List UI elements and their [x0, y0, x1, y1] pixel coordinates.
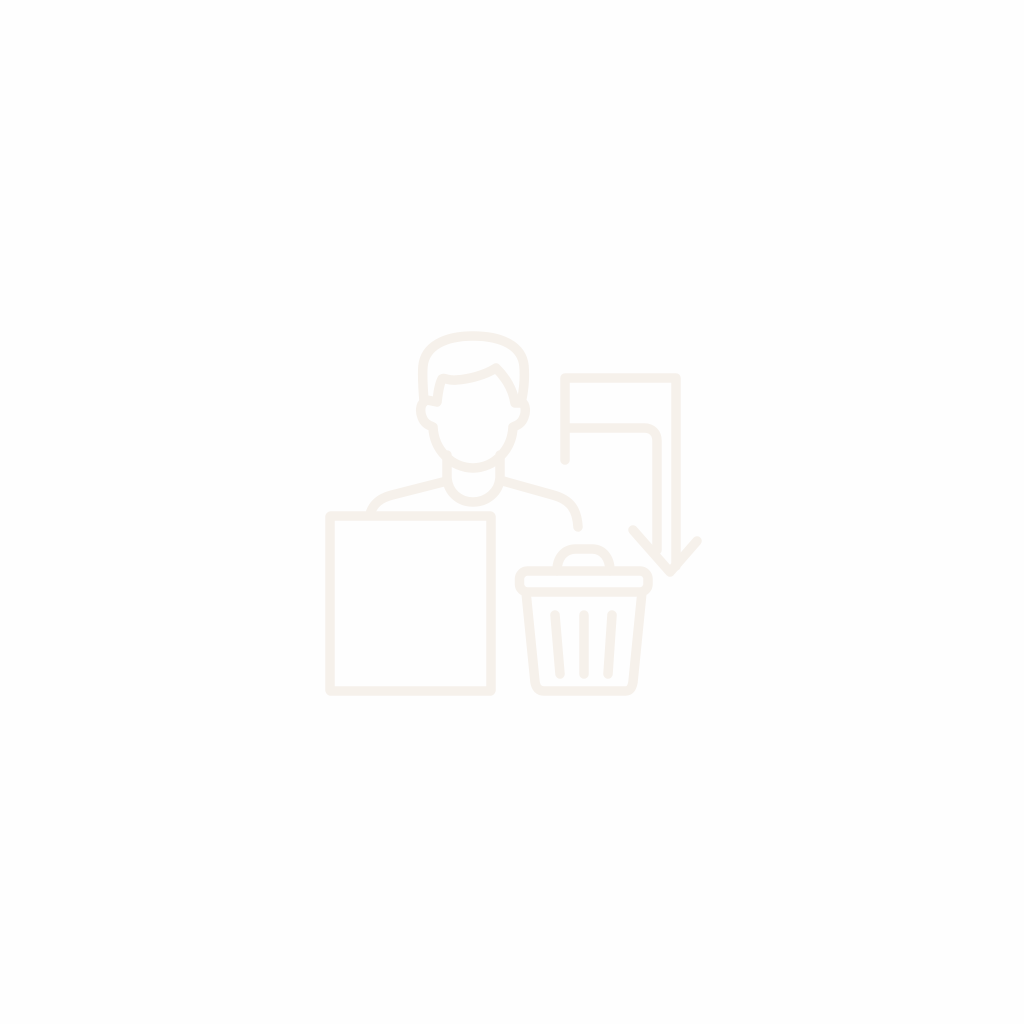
bin lid: [520, 571, 648, 592]
face and ears: [421, 402, 525, 468]
arrow head: [633, 530, 697, 572]
icon: person: [370, 336, 578, 527]
icon: trash bin: [520, 549, 648, 691]
right shoulder: [503, 481, 578, 527]
bin slats: [555, 615, 612, 674]
bin handle: [557, 549, 610, 571]
hairline: [427, 368, 522, 403]
icon: laptop panel: [330, 516, 491, 691]
neck and collar: [447, 455, 500, 502]
bin body: [526, 592, 642, 691]
left shoulder: [370, 481, 447, 514]
hair outline: [423, 336, 524, 403]
icon: down arrow: [565, 378, 697, 572]
arrow shaft: [565, 378, 676, 566]
